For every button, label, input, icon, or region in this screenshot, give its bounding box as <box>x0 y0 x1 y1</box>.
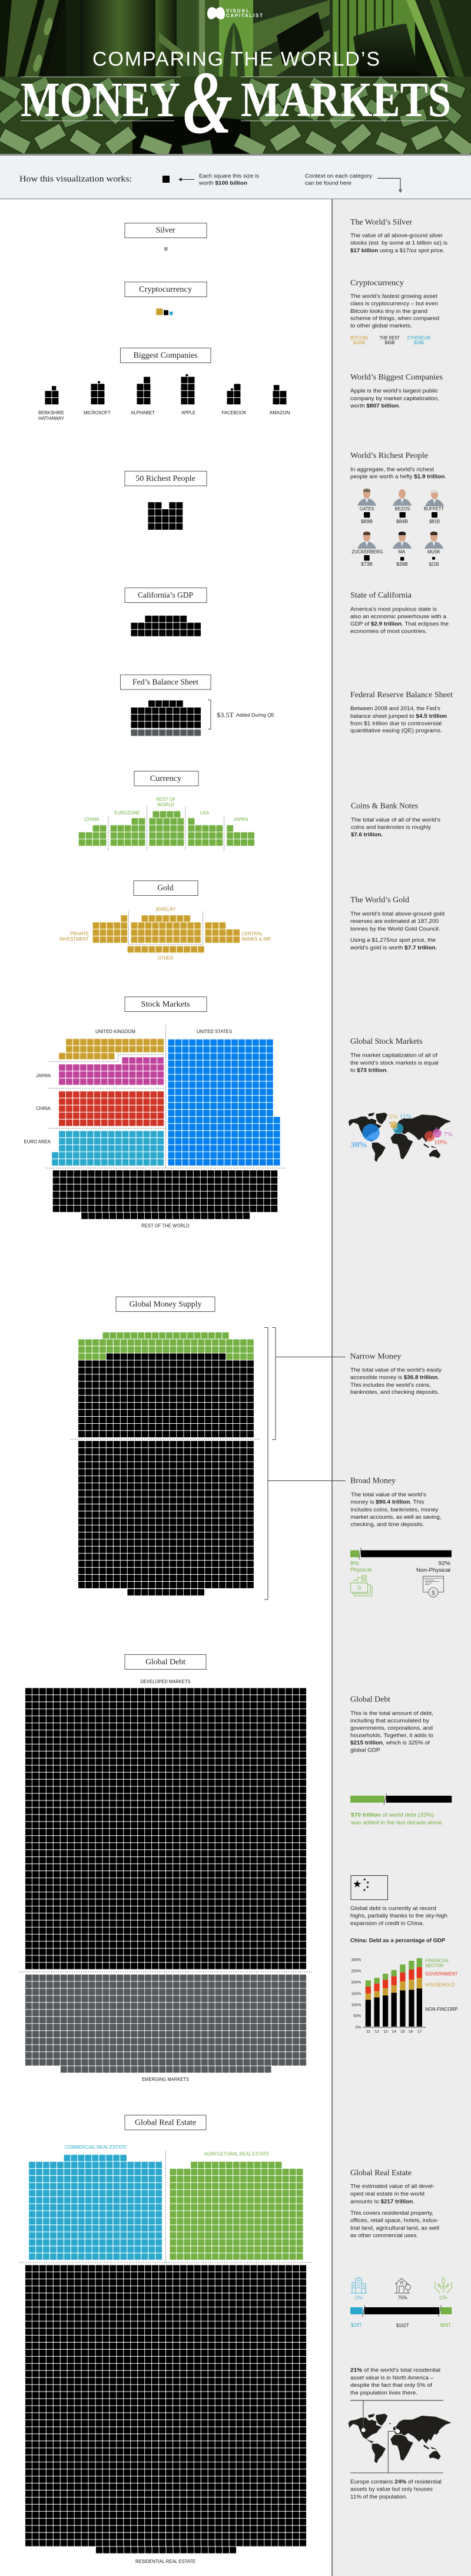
bar: physical vs non-physical money: Physical <box>350 1566 372 1574</box>
icon: web banking: $ <box>432 1590 435 1597</box>
icon: agriculture hands <box>435 2277 452 2293</box>
agricultural <box>170 2162 303 2260</box>
sidebar: global debt: expansion of credit in China. <box>350 1921 424 1927</box>
sidebar: the world's gold <box>350 896 445 951</box>
person: ma: $39B <box>396 562 408 567</box>
person: buffett <box>424 489 444 525</box>
sidebar: broad money: checking, and time deposits. <box>351 1522 424 1528</box>
how this visualization works band: Context on each category <box>305 173 372 179</box>
chart: china debt as percentage of gdp: ’13 <box>383 2030 388 2034</box>
crypto legend: $28B <box>414 340 424 345</box>
bar: real estate split: 75% <box>398 2295 407 2301</box>
crypto legend: ETHEREUM <box>407 335 430 341</box>
bracket: broad money <box>264 1328 346 1599</box>
panel: global debt: Global Debt <box>145 1658 185 1667</box>
united states <box>168 1039 280 1166</box>
residential <box>25 2265 306 2554</box>
header banner <box>0 0 471 160</box>
berkshire hathaway: BERKSHIRE <box>38 410 64 415</box>
sidebar: global debt: $215 trillion, which is 325% of <box>350 1740 430 1746</box>
sidebar: the world's gold: Using a $1,275/oz spot price, the <box>350 937 436 944</box>
sidebar: cryptocurrency: The world’s fastest growing asset <box>350 293 437 299</box>
panel: currency: CHINA <box>84 817 99 822</box>
sidebar: global debt: governments, corporations, and <box>350 1725 433 1731</box>
panel: gold: BANKS & IMF <box>242 936 271 942</box>
sidebar: global real estate: trial land, agricultural land, as well <box>350 2225 439 2231</box>
sidebar: the world's silver: stocks (est. by some at 1 billion oz) is <box>350 240 447 246</box>
berkshire hathaway: HATHAWAY <box>38 416 65 421</box>
sidebar: state of california <box>350 591 449 635</box>
rest of the world <box>52 1170 278 1219</box>
icon: sample square <box>162 176 170 183</box>
person: gates: $89B <box>361 519 373 525</box>
crypto legend: THE REST <box>380 335 400 341</box>
arrow: to sample square <box>179 178 194 181</box>
sidebar: global real estate: Europe contains 24% of residential <box>350 2479 442 2485</box>
sidebar: richest people: World’s Richest People <box>350 451 428 460</box>
sidebar panel background <box>332 199 471 2576</box>
person: ma <box>393 532 412 567</box>
panel: global real estate: Global Real Estate <box>135 2118 196 2128</box>
panel: stock markets: UNITED KINGDOM <box>95 1029 135 1034</box>
sidebar: narrow money: The total value of the world’s easily <box>350 1367 442 1373</box>
crypto legend: BITCOIN <box>350 335 368 341</box>
person: gates: GATES <box>360 506 374 512</box>
logo: VISUAL <box>226 8 249 14</box>
united kingdom <box>59 1038 164 1060</box>
sidebar: global real estate: The estimated value of all devel- <box>350 2184 434 2190</box>
sidebar: the world's silver: $17 billion using a $17/oz spot price. <box>350 248 445 254</box>
icon: commercial building <box>351 2276 367 2293</box>
panel: gold: JEWELRY <box>155 906 176 912</box>
chart: china debt as percentage of gdp: 250% <box>351 1969 361 1973</box>
chart: china debt as percentage of gdp: 100% <box>351 2003 361 2007</box>
sidebar: coins and bank notes <box>351 802 440 838</box>
panel: gold: INVESTMENT <box>59 936 89 942</box>
microsoft: MICROSOFT <box>84 410 111 415</box>
berkshire hathaway <box>38 386 65 421</box>
sidebar: biggest companies: World’s Biggest Companies <box>350 373 443 382</box>
photo background: city and money <box>0 0 471 160</box>
sidebar: broad money <box>350 1477 452 1597</box>
apple <box>181 374 195 415</box>
person: bezos <box>393 489 412 525</box>
panel: global real estate: RESIDENTIAL REAL ESTATE <box>135 2559 195 2564</box>
sidebar: global real estate: amounts to $217 trillion. <box>350 2198 414 2205</box>
bracket: narrow money <box>272 1328 346 1440</box>
chart: china debt as percentage of gdp: ’17 <box>417 2030 422 2034</box>
sidebar: global stock markets: Global Stock Markets <box>350 1037 423 1046</box>
chart: china debt as percentage of gdp <box>351 1958 457 2034</box>
sidebar: global debt: including that accumulated by <box>350 1717 429 1724</box>
sidebar: broad money: includes coins, banknotes, money <box>351 1506 439 1513</box>
sidebar: state of california: America’s most populous state is <box>350 606 437 613</box>
title: money & markets: MONEY <box>21 72 180 127</box>
panel: silver: Silver <box>155 226 175 235</box>
panel: gold: PRIVATE <box>70 931 89 936</box>
commercial <box>29 2155 162 2260</box>
panel: california gdp: California’s GDP <box>138 591 193 600</box>
logo <box>207 7 263 19</box>
sidebar: federal reserve: Federal Reserve Balance Sheet <box>350 691 453 700</box>
panel: stock markets: Stock Markets <box>141 1000 190 1009</box>
panel: currency: USA <box>200 810 210 816</box>
sidebar: global real estate: despite the fact that only 5% of <box>350 2382 432 2389</box>
world map with market bubbles: 7% <box>444 1131 453 1138</box>
panel: global money supply: Global Money Supply <box>130 1300 201 1309</box>
euro area <box>52 1130 164 1166</box>
sidebar: narrow money: This includes the world’s coins, <box>350 1382 431 1388</box>
sidebar: global debt: global GDP. <box>350 1747 381 1754</box>
chart legend: NON-FINCORP <box>425 2007 457 2012</box>
sidebar: global real estate: 11% of the population. <box>350 2493 407 2500</box>
sidebar: the world's silver <box>350 218 447 254</box>
panel: cryptocurrency <box>125 282 207 315</box>
world map with market bubbles: 10% <box>434 1139 447 1146</box>
sidebar: cryptocurrency: to other global markets. <box>350 323 412 329</box>
panel: currency: JAPAN <box>234 817 248 822</box>
sidebar: richest people: people are worth a hefty $1.9 trillion. <box>350 474 446 480</box>
sidebar: global stock markets: the world’s stock markets is equal <box>350 1060 438 1067</box>
how this visualization works band: Each square this size is <box>199 173 259 179</box>
chart: china debt as percentage of gdp: 0% <box>356 2026 361 2030</box>
crypto legend: $100B <box>353 340 365 345</box>
bar: physical vs non-physical money: 92% <box>438 1561 450 1566</box>
sidebar: state of california: GDP of $2.9 trillion. That eclipses the <box>350 621 449 627</box>
panel: fed balance sheet <box>120 675 274 736</box>
sidebar: global real estate: the population lives there. <box>350 2390 417 2396</box>
chart legend: SECTOR <box>425 1963 443 1968</box>
arrow: to sidebar <box>377 178 402 192</box>
chart legend <box>425 1958 457 2012</box>
sidebar: global debt: Global Debt <box>350 1695 390 1704</box>
sidebar: cryptocurrency: class is cryptocurrency – but even <box>350 301 438 307</box>
panel: fed balance sheet: Fed’s Balance Sheet <box>132 678 198 687</box>
panel: fed balance sheet: $3.5T <box>217 711 234 719</box>
crypto legend: $45B <box>385 340 394 345</box>
panel: 50 richest people <box>125 471 207 530</box>
sidebar: the world's silver: The value of all above-ground silver <box>350 232 443 239</box>
how this visualization works band <box>0 154 471 199</box>
title: money & markets: & <box>183 53 233 152</box>
sidebar: richest people: In aggregate, the world’s richest <box>350 467 434 473</box>
facebook <box>221 384 247 415</box>
bar: physical vs non-physical money: Non-Physical <box>416 1567 450 1574</box>
panel: gold <box>59 880 271 961</box>
bar: debt added in last decade <box>350 1794 452 1826</box>
sidebar: global debt: China: Debt as a percentage of GDP <box>350 1938 446 1944</box>
world map with market bubbles: 5% <box>389 1114 398 1120</box>
bar: real estate split: $26T <box>440 2323 451 2328</box>
person: zuckerberg <box>352 532 383 567</box>
bar: debt added in last decade: was added in the last decade alone. <box>350 1819 443 1826</box>
sidebar: the world's silver: The World’s Silver <box>350 218 412 227</box>
sidebar: biggest companies <box>350 373 443 409</box>
japan <box>59 1057 164 1085</box>
panel: global real estate: COMMERCIAL REAL ESTATE <box>65 2145 127 2150</box>
bar: real estate split <box>350 2295 452 2328</box>
icon: cash and coins <box>351 1575 372 1596</box>
sidebar: global real estate: 21% of the world’s total residential <box>350 2367 440 2373</box>
title: comparing the world's: COMPARING THE WORLD’S <box>92 48 380 71</box>
sidebar: coins and bank notes: The total value of all of the world’s <box>351 817 440 823</box>
how this visualization works band: worth $100 billion <box>198 180 247 186</box>
chart: china debt as percentage of gdp: ’16 <box>408 2030 413 2034</box>
sidebar: state of california: also an economic powerhouse with a <box>350 614 447 620</box>
how this visualization works band: can be found here <box>305 180 351 186</box>
sidebar: coins and bank notes: $7.6 trillion. <box>351 832 383 838</box>
sidebar: the world's gold: The world’s total above-ground gold <box>350 911 445 917</box>
sidebar: broad money: Broad Money <box>350 1477 396 1486</box>
sidebar: global debt: households. Together, it adds to <box>350 1732 433 1739</box>
sidebar: federal reserve <box>350 691 453 734</box>
panel: currency: WORLD <box>157 802 174 807</box>
sidebar: narrow money <box>350 1352 442 1396</box>
panel: biggest companies: Biggest Companies <box>133 351 198 360</box>
icon: web banking <box>423 1576 444 1597</box>
sidebar: global debt: Global debt is currently at record <box>350 1905 436 1912</box>
panel: global debt: EMERGING MARKETS <box>142 2077 189 2082</box>
sidebar: global real estate: as other commercial uses. <box>350 2232 418 2239</box>
person: musk <box>424 532 443 567</box>
sidebar: federal reserve: Between 2008 and 2014, the Fed’s <box>350 705 440 712</box>
person: bezos: $84B <box>396 519 408 525</box>
panel: stock markets: REST OF THE WORLD <box>141 1223 190 1228</box>
facebook: FACEBOOK <box>221 410 247 415</box>
crypto legend <box>350 335 430 345</box>
person: musk: MUSK <box>427 549 441 555</box>
sidebar: global real estate: offices, retail space, hotels, indus- <box>350 2218 439 2224</box>
world map with market bubbles: 11% <box>400 1113 412 1120</box>
chart: china debt as percentage of gdp: 300% <box>351 1958 361 1962</box>
person: gates <box>357 489 376 525</box>
panel: california gdp <box>125 588 207 636</box>
panel: stock markets: EURO AREA <box>24 1139 51 1144</box>
chart: china debt as percentage of gdp: ’14 <box>391 2030 396 2034</box>
sidebar: federal reserve: from $1 trillion due to controversial <box>350 720 442 727</box>
sidebar: state of california: economies of most countries. <box>350 628 427 635</box>
person: buffett: $81B <box>429 519 440 525</box>
sidebar: global debt: highs, partially thanks to the sky-high <box>350 1913 447 1919</box>
china <box>59 1091 164 1126</box>
bar: physical vs non-physical money: 8% <box>350 1561 359 1566</box>
sidebar: global real estate <box>349 2169 452 2500</box>
panel: stock markets <box>24 997 286 1228</box>
chart: china debt as percentage of gdp: 150% <box>351 1992 361 1996</box>
microsoft <box>84 381 111 415</box>
sidebar: biggest companies: Apple is the world’s largest public <box>350 388 438 394</box>
sidebar: global real estate: asset value is in North America – <box>350 2374 434 2381</box>
sidebar: narrow money: Narrow Money <box>350 1352 401 1361</box>
bar: real estate split: $29T <box>351 2323 362 2328</box>
sidebar: biggest companies: worth $807 billion . <box>350 403 400 409</box>
panel: global debt: DEVELOPED MARKETS <box>140 1679 191 1684</box>
sidebar: global stock markets: to $73 trillion. <box>350 1067 388 1074</box>
panel: cryptocurrency: Cryptocurrency <box>139 285 192 294</box>
bar: physical vs non-physical money <box>350 1548 452 1574</box>
bar: debt added in last decade: $70 trillion of world debt (33%) <box>351 1812 434 1819</box>
world map with callouts <box>349 2400 452 2473</box>
panel: stock markets: JAPAN <box>36 1073 51 1078</box>
amazon <box>270 385 290 415</box>
sidebar: cryptocurrency: Bitcoin looks tiny in the grand <box>350 308 427 315</box>
panel: global debt <box>19 1655 312 2082</box>
person: buffett: BUFFETT <box>424 506 444 512</box>
panel: global money supply <box>70 1297 346 1599</box>
world map with market bubbles: 38% <box>350 1140 367 1149</box>
panel: stock markets: CHINA <box>36 1106 51 1111</box>
icon: house <box>394 2278 411 2293</box>
panel: currency: REST OF <box>156 797 175 802</box>
sidebar: global real estate: This covers residential property, <box>350 2210 433 2217</box>
sidebar: global debt <box>350 1695 457 2034</box>
sidebar: the world's gold: reserves are estimated at 187,200 <box>350 918 439 925</box>
sidebar: the world's gold: tonnes by the World Gold Council. <box>350 926 440 932</box>
sidebar: richest people <box>350 451 446 567</box>
panel: global real estate <box>19 2115 312 2564</box>
alphabet <box>131 377 155 415</box>
panel: global real estate: AGRICULTURAL REAL ESTATE <box>204 2151 269 2157</box>
sidebar: the world's gold: The World’s Gold <box>350 896 409 905</box>
chart legend: FINANCIAL <box>425 1958 450 1964</box>
person: musk: $21B <box>429 562 439 567</box>
sidebar: cryptocurrency: scheme of things, when compared <box>350 315 439 322</box>
sidebar: broad money: The total value of the world’s <box>351 1492 426 1498</box>
panel: stock markets: UNITED STATES <box>197 1029 232 1034</box>
bar: real estate split: $162T <box>396 2323 409 2328</box>
bar: real estate split: 13% <box>354 2295 363 2301</box>
sidebar: narrow money: accessible money is $36.8 trillion. <box>350 1374 439 1381</box>
sidebar: coins and bank notes: Coins & Bank Notes <box>351 802 418 811</box>
sidebar: global stock markets <box>349 1037 453 1162</box>
apple: APPLE <box>181 410 195 415</box>
sidebar divider <box>331 199 333 2576</box>
how this visualization works band: How this visualization works: <box>19 174 132 184</box>
sidebar: broad money: market accounts, as well as saving, <box>351 1514 442 1520</box>
logo: CAPITALIST <box>226 13 263 18</box>
chart: china debt as percentage of gdp: ’11 <box>366 2030 370 2034</box>
chart legend: HOUSEHOLD <box>425 1983 455 1987</box>
amazon: AMAZON <box>270 410 290 415</box>
person: zuckerberg: ZUCKERBERG <box>352 549 383 555</box>
sidebar: cryptocurrency <box>350 279 439 345</box>
panel: silver <box>125 223 207 250</box>
panel: 50 richest people: 50 Richest People <box>135 474 195 483</box>
bars by year <box>366 1958 422 2027</box>
person: ma: MA <box>398 549 406 555</box>
sidebar: the world's gold: world’s gold is worth $7.7 trillion. <box>350 945 437 951</box>
chart: china debt as percentage of gdp: ’15 <box>400 2030 405 2034</box>
world map with market bubbles <box>349 1113 453 1162</box>
bar: real estate split: 12% <box>439 2295 447 2301</box>
panel: currency: EUROZONE <box>114 810 140 816</box>
person: bezos: BEZOS <box>395 506 410 512</box>
panel: gold: Gold <box>157 884 174 892</box>
panel: currency <box>78 771 254 851</box>
chart legend: GOVERNMENT <box>425 1971 457 1977</box>
sidebar: biggest companies: company by market capitalization, <box>350 395 439 402</box>
sidebar: global real estate: Global Real Estate <box>350 2169 412 2178</box>
sidebar: federal reserve: quantitative easing (QE) programs. <box>350 727 442 734</box>
panel: biggest companies <box>38 348 290 421</box>
panel: currency: Currency <box>150 774 181 783</box>
sidebar: state of california: State of California <box>350 591 412 600</box>
sidebar: global stock markets: The market capitalization of all of <box>350 1053 437 1058</box>
person: zuckerberg: $73B <box>361 562 373 567</box>
chart: china debt as percentage of gdp: ’12 <box>374 2030 379 2034</box>
sidebar: coins and bank notes: coins and banknotes is roughly <box>351 824 431 831</box>
chart: china debt as percentage of gdp: 50% <box>353 2014 361 2018</box>
sidebar: narrow money: banknotes, and checking deposits. <box>350 1389 439 1396</box>
sidebar: cryptocurrency: Cryptocurrency <box>350 279 404 288</box>
title: money & markets <box>21 53 451 152</box>
panel: gold: OTHER <box>158 956 173 961</box>
panel: gold: CENTRAL <box>242 931 263 936</box>
panel: fed balance sheet: Added During QE <box>236 713 274 718</box>
sidebar: global real estate: assets by value but only houses <box>350 2486 433 2492</box>
sidebar: global real estate: oped real estate in the world <box>350 2191 424 2197</box>
bracket: added during qe <box>208 700 211 729</box>
chart: china debt as percentage of gdp: 200% <box>351 1980 361 1985</box>
sidebar: broad money: money is $90.4 trillion. This <box>351 1499 424 1505</box>
sidebar: global debt: This is the total amount of debt, <box>350 1710 433 1717</box>
sidebar: federal reserve: balance sheet jumped to $4.5 trillion <box>350 713 447 720</box>
icon: china flag <box>351 1875 387 1900</box>
alphabet: ALPHABET <box>131 410 155 415</box>
